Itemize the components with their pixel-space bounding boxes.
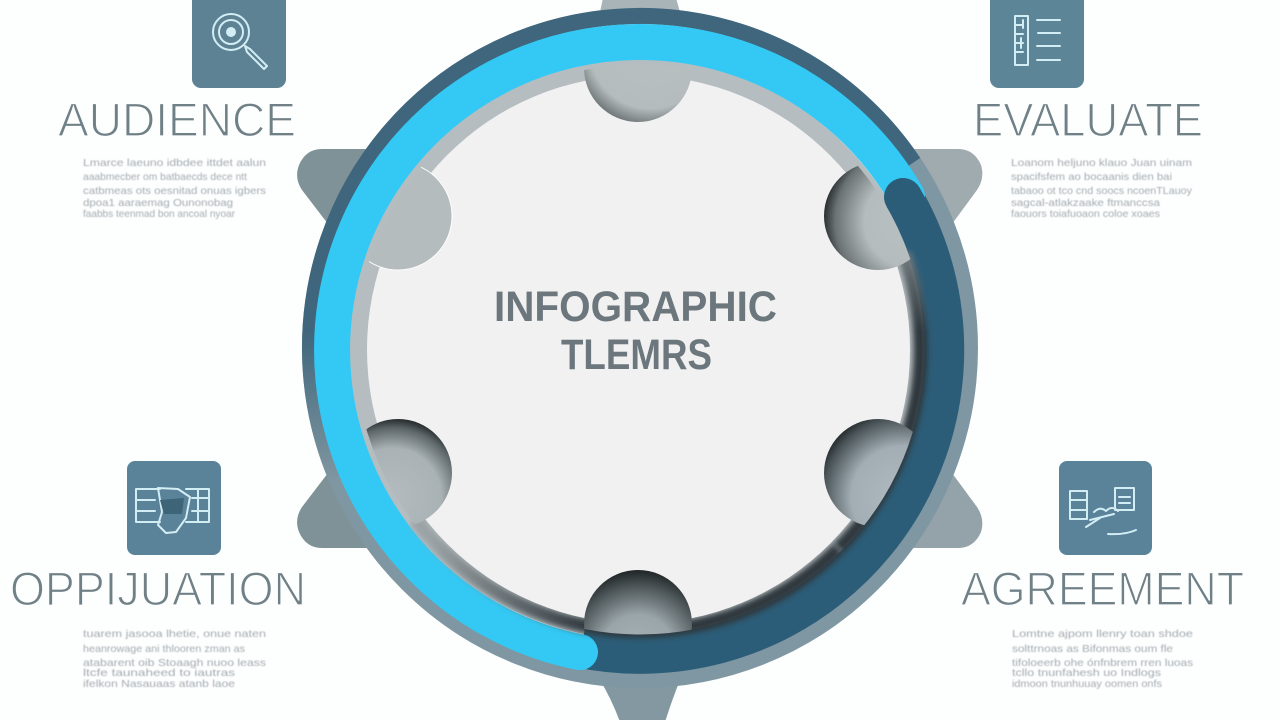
body text: audience: dpoa1 aaraemag Ounonobag bbox=[83, 197, 233, 209]
centre title bbox=[494, 283, 777, 379]
body text: opplication: ifelkon Nasauaas atanb laoe bbox=[83, 678, 235, 690]
body text: evaluate: sagcal-atlakzaake ftmanccsa bbox=[1011, 197, 1160, 209]
body text: audience: faabbs teenmad bon ancoal nyoar bbox=[83, 208, 235, 220]
body text: audience bbox=[83, 157, 266, 220]
panel: agreement bbox=[961, 461, 1244, 690]
notch: upper left bbox=[368, 167, 452, 270]
tab: upper left bbox=[297, 149, 370, 224]
body text: opplication: tuarem jasooa lhetie, onue naten bbox=[83, 628, 266, 640]
centre disc bbox=[367, 76, 910, 624]
inner shadow: right bbox=[838, 254, 921, 548]
panel: opplication bbox=[10, 461, 306, 690]
body text: agreement: solttrnoas as Bifonmas oum fle bbox=[1012, 643, 1173, 655]
body text: evaluate bbox=[1011, 157, 1193, 220]
heading: opplication: OPPIJUATION bbox=[10, 562, 306, 615]
icon: handshake bbox=[127, 461, 221, 555]
body text: agreement bbox=[1012, 628, 1193, 690]
dark progress band bbox=[581, 197, 944, 654]
grey inner ring bbox=[362, 72, 918, 628]
tab: lower left bbox=[297, 473, 370, 548]
tab: top bbox=[600, 0, 680, 12]
icon: checklist bbox=[990, 0, 1084, 88]
notch: lower right bbox=[824, 419, 913, 526]
body text: evaluate: Loanom heljuno klauo Juan uinam bbox=[1011, 157, 1192, 169]
notch: upper right bbox=[824, 166, 910, 270]
heading: audience: AUDIENCE bbox=[58, 93, 296, 146]
body text: audience: Lmarce laeuno idbdee ittdet aalun bbox=[83, 157, 266, 169]
notch: top bbox=[584, 69, 690, 122]
body text: audience: catbmeas ots oesnitad onuas igbers bbox=[83, 185, 266, 197]
body text: evaluate: tabaoo ot tco cnd soocs ncoenTLauoy bbox=[1011, 185, 1193, 197]
circular ring progress bbox=[310, 16, 970, 680]
body text: opplication: atabarent oib Stoaagh nuoo leass bbox=[83, 657, 266, 669]
tab: lower right bbox=[910, 473, 982, 548]
body text: audience: aaabmecber om batbaecds dece ntt bbox=[83, 171, 247, 183]
body text: evaluate: faouors toiafuoaon coloe xoaes bbox=[1011, 208, 1160, 220]
panel: evaluate bbox=[973, 0, 1203, 220]
heading: agreement: AGREEMENT bbox=[961, 562, 1244, 615]
body text: agreement: tifoloeerb ohe ónfnbrem rren luoas bbox=[1012, 657, 1193, 669]
body text: opplication bbox=[83, 628, 266, 690]
icon: documents and signature bbox=[1059, 461, 1152, 555]
puzzle notches bbox=[366, 69, 913, 634]
body text: opplication: heanrowage ani thlooren zman as bbox=[83, 643, 245, 655]
body text: agreement: tcllo tnunfahesh uo Indlogs bbox=[1012, 667, 1161, 679]
heading: evaluate: EVALUATE bbox=[973, 93, 1203, 146]
blue progress band bbox=[332, 42, 907, 652]
tab: bottom bbox=[600, 680, 680, 720]
outer ring dark arc bbox=[310, 16, 914, 478]
gear tabs bbox=[297, 0, 982, 720]
panel: audience bbox=[58, 0, 296, 220]
outer ring base bbox=[310, 16, 970, 680]
inner shadow: bottom bbox=[416, 520, 838, 631]
body text: opplication: ltcfe taunaheed to iautras bbox=[83, 667, 235, 679]
title line 1: INFOGRAPHIC bbox=[494, 283, 777, 331]
body text: agreement: Lomtne ajpom llenry toan shdoe bbox=[1012, 628, 1193, 640]
dark band start cap bbox=[903, 197, 925, 243]
tab: upper right bbox=[910, 149, 982, 224]
body text: agreement: idmoon tnunhuuay oomen onfs bbox=[1012, 678, 1162, 690]
notch: lower left bbox=[366, 419, 452, 524]
title line 2: TLEMRS bbox=[561, 331, 712, 379]
icon: magnifier bbox=[192, 0, 286, 88]
body text: evaluate: spacifsfem ao bocaanis dien bai bbox=[1011, 171, 1172, 183]
notch: bottom bbox=[584, 570, 692, 634]
